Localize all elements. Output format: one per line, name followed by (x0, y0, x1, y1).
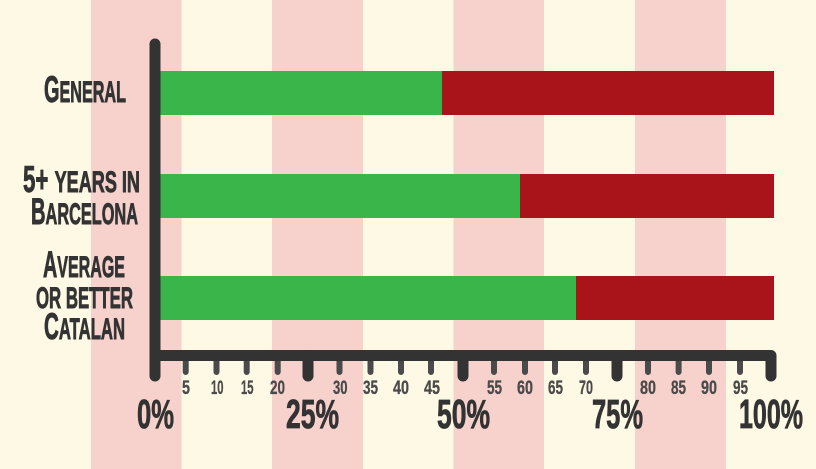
minor axis labels: 20 (270, 378, 285, 399)
bar: 5+ years in Barcelona (160, 174, 774, 218)
category label: 5+ years in Barcelona (23, 159, 140, 232)
major axis labels (137, 391, 803, 437)
minor axis labels: 35 (363, 378, 378, 399)
minor axis labels: 95 (733, 378, 748, 399)
minor axis labels: 85 (671, 378, 686, 399)
minor axis labels: 70 (579, 378, 593, 399)
category label: Average or better Catalan: CATALAN (44, 306, 125, 347)
minor axis labels: 60 (517, 378, 533, 399)
minor axis labels: 55 (487, 378, 502, 399)
minor axis labels: 10 (211, 378, 224, 399)
minor axis labels: 65 (548, 378, 563, 399)
minor axis labels (182, 378, 748, 399)
minor axis labels: 15 (241, 378, 254, 399)
category label: 5+ years in Barcelona: 5+ YEARS IN (23, 159, 140, 200)
major axis labels: 75% (592, 391, 643, 437)
category label: 5+ years in Barcelona: BARCELONA (31, 191, 138, 232)
bar: General (160, 71, 774, 115)
minor axis labels: 5 (182, 378, 190, 399)
bar: Average or better Catalan (160, 276, 774, 320)
major axis labels: 50% (437, 391, 490, 437)
minor axis labels: 80 (640, 378, 656, 399)
category label: Average or better Catalan: OR BETTER (36, 282, 133, 315)
minor axis labels: 90 (701, 378, 717, 399)
category label: General: GENERAL (44, 69, 126, 110)
minor axis labels: 45 (424, 378, 440, 399)
background stripes (91, 0, 726, 469)
minor axis labels: 30 (333, 378, 348, 399)
minor axis labels: 40 (393, 378, 409, 399)
minor axis ticks (186, 358, 740, 372)
chart axes (155, 44, 771, 376)
major axis labels: 25% (286, 391, 339, 437)
category label: Average or better Catalan (36, 244, 133, 347)
category label: Average or better Catalan: AVERAGE (43, 244, 125, 285)
major axis labels: 0% (137, 391, 174, 437)
